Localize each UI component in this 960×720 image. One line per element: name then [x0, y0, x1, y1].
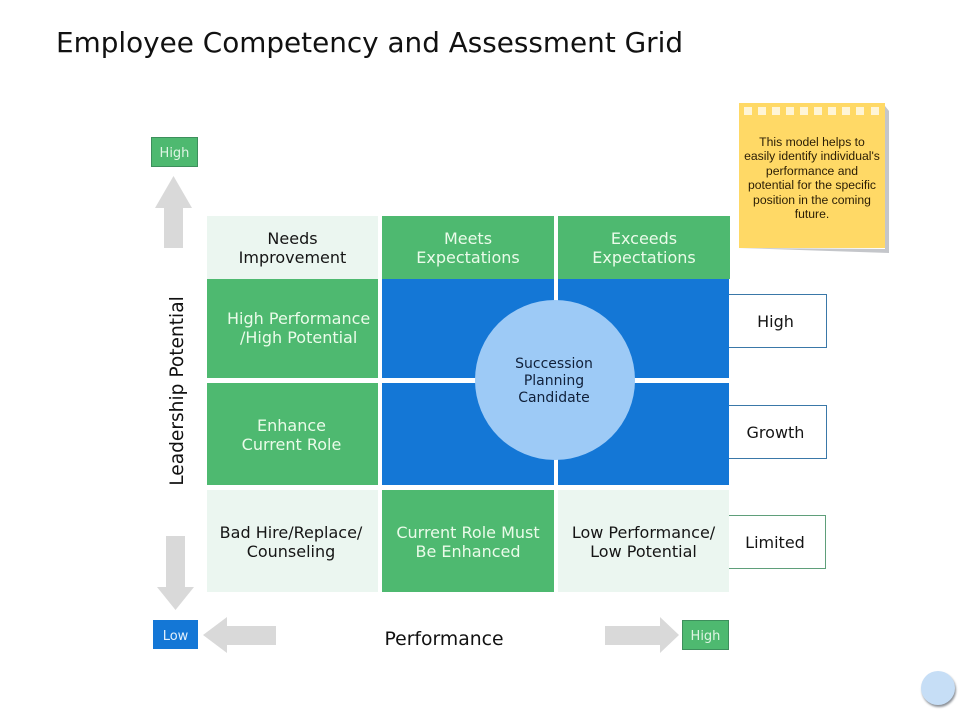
cell: bad hire [207, 490, 378, 592]
cell: high performance high potential: /High Potential [240, 328, 357, 347]
cell: low performance low potential: Low Performance/ [572, 523, 715, 542]
badge: y high: High [160, 146, 189, 161]
cell: high performance high potential [207, 279, 378, 378]
header: exceeds expectations: Exceeds [611, 228, 677, 248]
center circle: succession planning candidate [475, 300, 635, 460]
note text: potential for the specific [748, 178, 876, 192]
tab: growth: Growth [747, 422, 804, 442]
cell: bad hire: Bad Hire/Replace/ [220, 523, 362, 542]
badge: low [153, 620, 198, 649]
header: needs improvement: Needs [267, 228, 318, 248]
x axis label: Performance [384, 629, 504, 650]
y axis label: Leadership Potential [167, 296, 188, 486]
badge: x high [682, 620, 729, 650]
cell: low performance low potential: Low Potential [590, 542, 697, 561]
cell: current role must be enhanced: Current Role Must [396, 523, 540, 542]
cell: blue top right [558, 279, 729, 378]
tab: high: High [757, 312, 794, 330]
note text: performance and [766, 164, 858, 178]
tab: limited: Limited [745, 532, 805, 552]
tab: high [729, 294, 827, 348]
arrow: down [157, 536, 194, 610]
arrow: left [203, 617, 276, 653]
note perforations [744, 107, 879, 115]
sticky note [739, 103, 889, 253]
note text: position in the coming [753, 193, 871, 207]
center circle: succession planning candidate: Candidate [518, 390, 590, 406]
cell: current role must be enhanced [382, 490, 554, 592]
center circle: succession planning candidate: Planning [524, 372, 584, 388]
note text: easily identify individual's [744, 149, 880, 163]
note text [744, 135, 880, 221]
header: meets expectations: Expectations [416, 248, 520, 266]
cell: enhance current role: Current Role [242, 435, 341, 454]
cell: bad hire: Counseling [247, 542, 335, 561]
cell: enhance current role [207, 383, 378, 485]
arrow: up [155, 176, 192, 248]
note text: This model helps to [759, 135, 865, 149]
cell: high performance high potential: High Performance [227, 309, 370, 328]
header: exceeds expectations [558, 216, 730, 279]
header: needs improvement: Improvement [239, 248, 346, 266]
tab: limited [729, 515, 826, 569]
badge: y high [151, 137, 198, 167]
title: Employee Competency and Assessment Grid [56, 26, 683, 59]
note text: future. [795, 207, 829, 221]
tab: growth [729, 405, 827, 459]
arrow: right [605, 617, 679, 653]
cell: low performance low potential [558, 490, 729, 592]
header: meets expectations [382, 216, 554, 279]
note paper [739, 103, 885, 248]
cell: current role must be enhanced: Be Enhanced [415, 542, 521, 561]
badge: low: Low [163, 628, 188, 644]
corner circle [921, 671, 955, 705]
cell: enhance current role: Enhance [257, 416, 326, 435]
header: meets expectations: Meets [444, 228, 492, 248]
center circle: succession planning candidate: Succession [515, 356, 593, 372]
cell: blue middle [382, 383, 554, 485]
cell: blue middle right [558, 383, 729, 485]
note shadow [742, 106, 889, 253]
cell: blue top middle [382, 279, 554, 378]
badge: x high: High [691, 629, 720, 644]
header: needs improvement [207, 216, 378, 279]
header: exceeds expectations: Expectations [592, 248, 696, 266]
